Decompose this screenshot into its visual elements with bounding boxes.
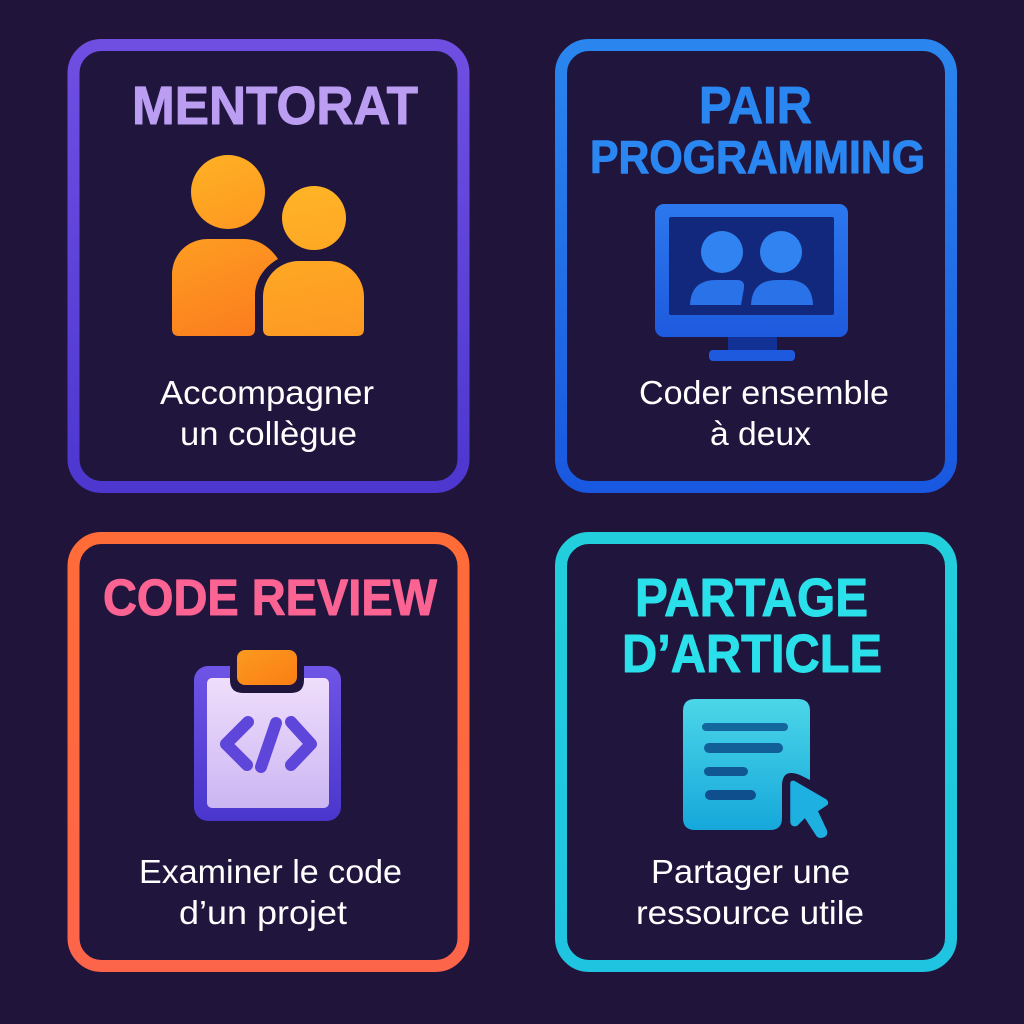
text: mentorat description: un collègue: [180, 415, 357, 452]
panel: code review: [74, 538, 464, 966]
text: partage d'article description: ressource utile: [636, 894, 864, 931]
text: mentorat description: [160, 374, 374, 452]
icon: document with cursor: [683, 699, 828, 837]
heading: partage d'article: PARTAGE: [635, 568, 868, 628]
panel: mentorat: [74, 45, 464, 487]
heading: mentorat: MENTORAT: [132, 76, 418, 136]
heading: pair programming: PAIR: [699, 77, 812, 135]
heading: pair programming: PROGRAMMING: [590, 131, 925, 183]
panel: partage d'article: [561, 538, 951, 966]
text: pair programming description: [639, 374, 889, 452]
text: code review description: Examiner le code: [139, 853, 402, 890]
icon: clipboard with code: [194, 650, 341, 821]
text: code review description: [139, 853, 402, 931]
text: pair programming description: Coder ensemble: [639, 374, 889, 411]
text: mentorat description: Accompagner: [160, 374, 374, 411]
icon: monitor with two people: [655, 204, 848, 361]
text: pair programming description: à deux: [710, 415, 811, 452]
text: partage d'article description: Partager une: [651, 853, 850, 890]
heading: partage d'article: [622, 568, 882, 684]
heading: pair programming: [590, 77, 925, 183]
text: partage d'article description: [636, 853, 864, 931]
heading: partage d'article: D’ARTICLE: [622, 624, 882, 684]
panel: pair programming: [561, 45, 951, 487]
heading: code review: CODE REVIEW: [103, 569, 438, 626]
text: code review description: d’un projet: [179, 894, 347, 931]
icon: two people: [172, 155, 364, 336]
